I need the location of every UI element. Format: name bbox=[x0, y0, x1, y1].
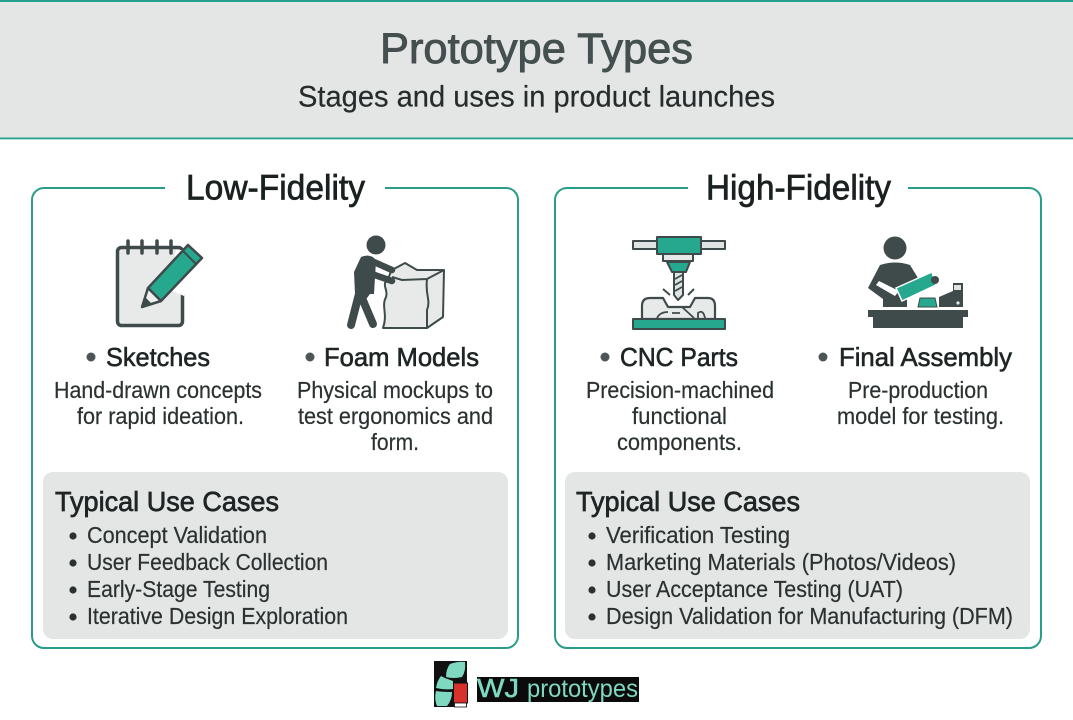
item: final assembly bbox=[818, 342, 1012, 429]
use cases box: high-fidelity: Typical Use Cases bbox=[576, 486, 800, 517]
item: sketches: Hand-drawn concepts bbox=[54, 377, 262, 403]
panel heading: low-fidelity: Low-Fidelity bbox=[186, 168, 365, 208]
panel: high-fidelity bbox=[555, 168, 1041, 648]
logo wordmark bbox=[477, 673, 639, 703]
use cases box: low-fidelity: Typical Use Cases bbox=[55, 486, 279, 517]
icon: CNC machine bbox=[633, 237, 725, 329]
use cases box: high-fidelity: Verification Testing bbox=[606, 522, 790, 548]
logo wordmark: prototypes bbox=[527, 675, 638, 703]
item: foam models: form. bbox=[371, 429, 419, 455]
logo mark bbox=[434, 661, 468, 707]
item: CNC parts: CNC Parts bbox=[620, 342, 738, 372]
use cases box: low-fidelity: Concept Validation bbox=[87, 522, 267, 548]
icon: notepad and pencil bbox=[118, 241, 205, 326]
use cases box: high-fidelity: Marketing Materials (Photos/Videos) bbox=[606, 549, 956, 575]
use cases box: high-fidelity bbox=[565, 472, 1030, 639]
panel: low-fidelity bbox=[32, 168, 518, 648]
item: sketches: Sketches bbox=[106, 342, 210, 372]
item: foam models bbox=[297, 342, 493, 455]
icon: person shaping foam block bbox=[351, 236, 444, 328]
item: final assembly: Final Assembly bbox=[839, 342, 1012, 372]
subtitle: Stages and uses in product launches bbox=[298, 80, 775, 114]
logo: WJ prototypes bbox=[434, 661, 639, 707]
item: sketches: for rapid ideation. bbox=[77, 403, 244, 429]
use cases box: low-fidelity: Early-Stage Testing bbox=[87, 576, 270, 602]
item: sketches bbox=[54, 342, 262, 429]
item: foam models: Foam Models bbox=[324, 342, 479, 372]
use cases box: high-fidelity: Design Validation for Manufacturing (DFM) bbox=[606, 603, 1013, 629]
item: CNC parts: components. bbox=[617, 429, 742, 455]
item: final assembly: Pre-production bbox=[848, 377, 988, 403]
use cases box: low-fidelity: Iterative Design Exploration bbox=[87, 603, 348, 629]
item: CNC parts: functional bbox=[632, 403, 727, 429]
logo wordmark: WJ bbox=[477, 673, 519, 703]
icon: person assembling at bench bbox=[868, 236, 968, 328]
use cases box: low-fidelity: User Feedback Collection bbox=[87, 549, 328, 575]
item: final assembly: model for testing. bbox=[837, 403, 1004, 429]
header band bbox=[0, 0, 1073, 139]
item: foam models: test ergonomics and bbox=[298, 403, 493, 429]
use cases box: low-fidelity bbox=[43, 472, 508, 639]
item: foam models: Physical mockups to bbox=[297, 377, 493, 403]
item: CNC parts bbox=[586, 342, 774, 455]
title: Prototype Types bbox=[380, 25, 693, 73]
use cases box: high-fidelity: User Acceptance Testing (UAT) bbox=[606, 576, 903, 602]
panel heading: high-fidelity: High-Fidelity bbox=[706, 168, 891, 208]
item: CNC parts: Precision-machined bbox=[586, 377, 774, 403]
